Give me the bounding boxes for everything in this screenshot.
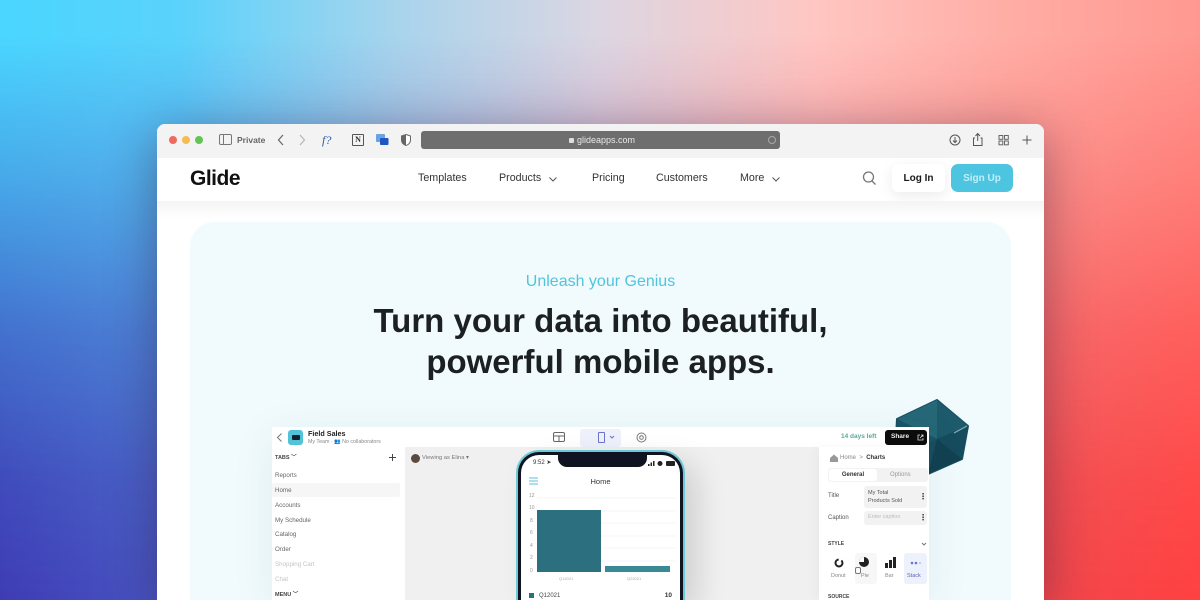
bar chart: Q22021: [627, 576, 642, 581]
sidebar items: [275, 472, 315, 598]
bar chart: 0: [530, 568, 533, 574]
app subtitle: My Team · 👥 No collaborators: [308, 439, 381, 445]
sidebar items: Chat: [275, 576, 288, 583]
preview canvas: [405, 447, 819, 600]
inactive tab: Options: [890, 472, 911, 478]
nav: templates: Templates: [418, 172, 467, 184]
bar chart: 8: [530, 518, 533, 524]
bar chart: 2: [530, 555, 533, 561]
left sidebar: [272, 447, 405, 600]
icon: selector chevron: [610, 436, 614, 439]
icon: style chevron: [922, 542, 926, 546]
icon: field menu: ⋮: [919, 513, 927, 522]
icon: field menu: ⋮: [919, 492, 927, 501]
icon: reload: [768, 136, 776, 144]
icon: app icon: [288, 430, 303, 445]
icon: back and forward arrows: [278, 134, 306, 146]
status time: 9:52 ➤: [533, 460, 551, 466]
stack option highlight: [904, 553, 927, 584]
icon: products chevron: [549, 177, 557, 182]
sidebar items: MENU ﹀: [275, 592, 298, 598]
chart legend row: [529, 592, 672, 599]
caption label: Caption: [828, 515, 849, 521]
bar chart: 6: [530, 530, 533, 536]
sign up button: [951, 164, 1013, 192]
pie option highlight: [855, 553, 877, 584]
url: glideapps.com: [577, 135, 635, 145]
browser window: [157, 124, 1044, 600]
icon: phone: [598, 432, 605, 443]
active tab: General: [842, 472, 864, 478]
bar chart: Q12021: [559, 576, 574, 581]
nav: more: More: [740, 172, 764, 184]
title value: My Total: [868, 490, 888, 496]
icon: 3D gem: [896, 399, 969, 475]
icon: shield: [401, 134, 411, 146]
app top bar: [272, 427, 929, 447]
bar label: Bar: [885, 573, 894, 579]
legend value: 10: [665, 592, 672, 599]
phone title: Home: [590, 477, 610, 486]
icon: notion extension: [352, 134, 364, 146]
active tab: [829, 469, 877, 481]
source heading: SOURCE: [828, 594, 849, 600]
logo: Glide: [190, 167, 240, 190]
viewing label: Viewing as Elina ▾: [422, 455, 469, 461]
caption placeholder: Enter caption: [868, 514, 900, 520]
title label: Title: [828, 493, 839, 499]
icon: lock: [569, 138, 574, 143]
app builder mockup: [272, 427, 929, 600]
icon: more chevron: [772, 177, 780, 182]
sign up button: Sign Up: [963, 173, 1001, 184]
sidebar items: Order: [275, 546, 291, 553]
private label: Private: [237, 135, 265, 145]
phone mockup: [518, 452, 683, 600]
sidebar items: Shopping Cart: [275, 561, 315, 568]
icon: back: [276, 433, 282, 442]
hero panel: [190, 222, 1011, 600]
main heading: Turn your data into beautiful,: [373, 302, 828, 339]
style heading: STYLE: [828, 541, 844, 547]
nav shadow band: [157, 201, 1044, 219]
pie label: Pie: [861, 573, 869, 579]
address bar: [421, 131, 780, 149]
avatar: [411, 454, 420, 463]
share label: Share: [891, 433, 909, 440]
icon: settings: [636, 432, 646, 442]
nav: pricing: Pricing: [592, 172, 625, 184]
title value: [868, 490, 902, 504]
sidebar items: Home: [275, 487, 292, 494]
trial badge: 14 days left: [841, 433, 876, 440]
segmented tabs: [828, 468, 928, 482]
icon: data view: [553, 432, 565, 442]
log in button: [892, 164, 945, 192]
bar chart: 12: [529, 493, 535, 499]
main heading: powerful mobile apps.: [426, 343, 775, 380]
notch: [558, 455, 647, 467]
breadcrumb: Home > Charts: [840, 455, 885, 461]
sidebar items: My Schedule: [275, 517, 311, 524]
eyebrow heading: Unleash your Genius: [526, 273, 675, 290]
icon: search: [862, 171, 876, 185]
icon: hamburger menu: [529, 478, 538, 484]
status icons: [648, 461, 675, 466]
donut label: Donut: [831, 573, 846, 579]
tabs heading: TABS ﹀: [275, 455, 297, 461]
icon: sidebar: [219, 134, 232, 145]
main heading: [373, 302, 828, 380]
stack label: Stack: [907, 573, 921, 579]
navigation bar: [157, 158, 1044, 201]
browser toolbar: [157, 124, 1044, 158]
icon: home: [830, 454, 838, 462]
sidebar items: Catalog: [275, 531, 296, 538]
icon: windows extension: [376, 134, 388, 145]
window controls: [169, 136, 203, 144]
log in button: Log In: [904, 173, 934, 184]
nav: products: Products: [499, 172, 541, 184]
chart style icons: [834, 557, 921, 568]
icon: open external: [918, 434, 924, 440]
selected row: [272, 483, 400, 497]
toolbar right icons: [950, 132, 1032, 146]
legend label: Q12021: [539, 593, 560, 599]
device selector: [580, 429, 621, 447]
caption field: [864, 511, 927, 525]
right properties panel: [819, 447, 929, 600]
title value: Products Sold: [868, 498, 902, 504]
share button: [885, 430, 927, 445]
title field: [864, 486, 927, 508]
sidebar items: Reports: [275, 472, 297, 479]
icon: notion extension: N: [355, 135, 361, 144]
bar chart: 4: [530, 543, 533, 549]
icon: add tab: [389, 454, 396, 461]
sidebar items: Accounts: [275, 502, 300, 509]
nav: customers: Customers: [656, 172, 708, 184]
app title: Field Sales: [308, 429, 346, 438]
icon: formula extension: f?: [322, 133, 331, 147]
bar chart: 10: [529, 505, 535, 511]
icon: cursor: [855, 567, 861, 574]
bar chart: [529, 493, 676, 581]
legend swatch: [529, 593, 534, 598]
